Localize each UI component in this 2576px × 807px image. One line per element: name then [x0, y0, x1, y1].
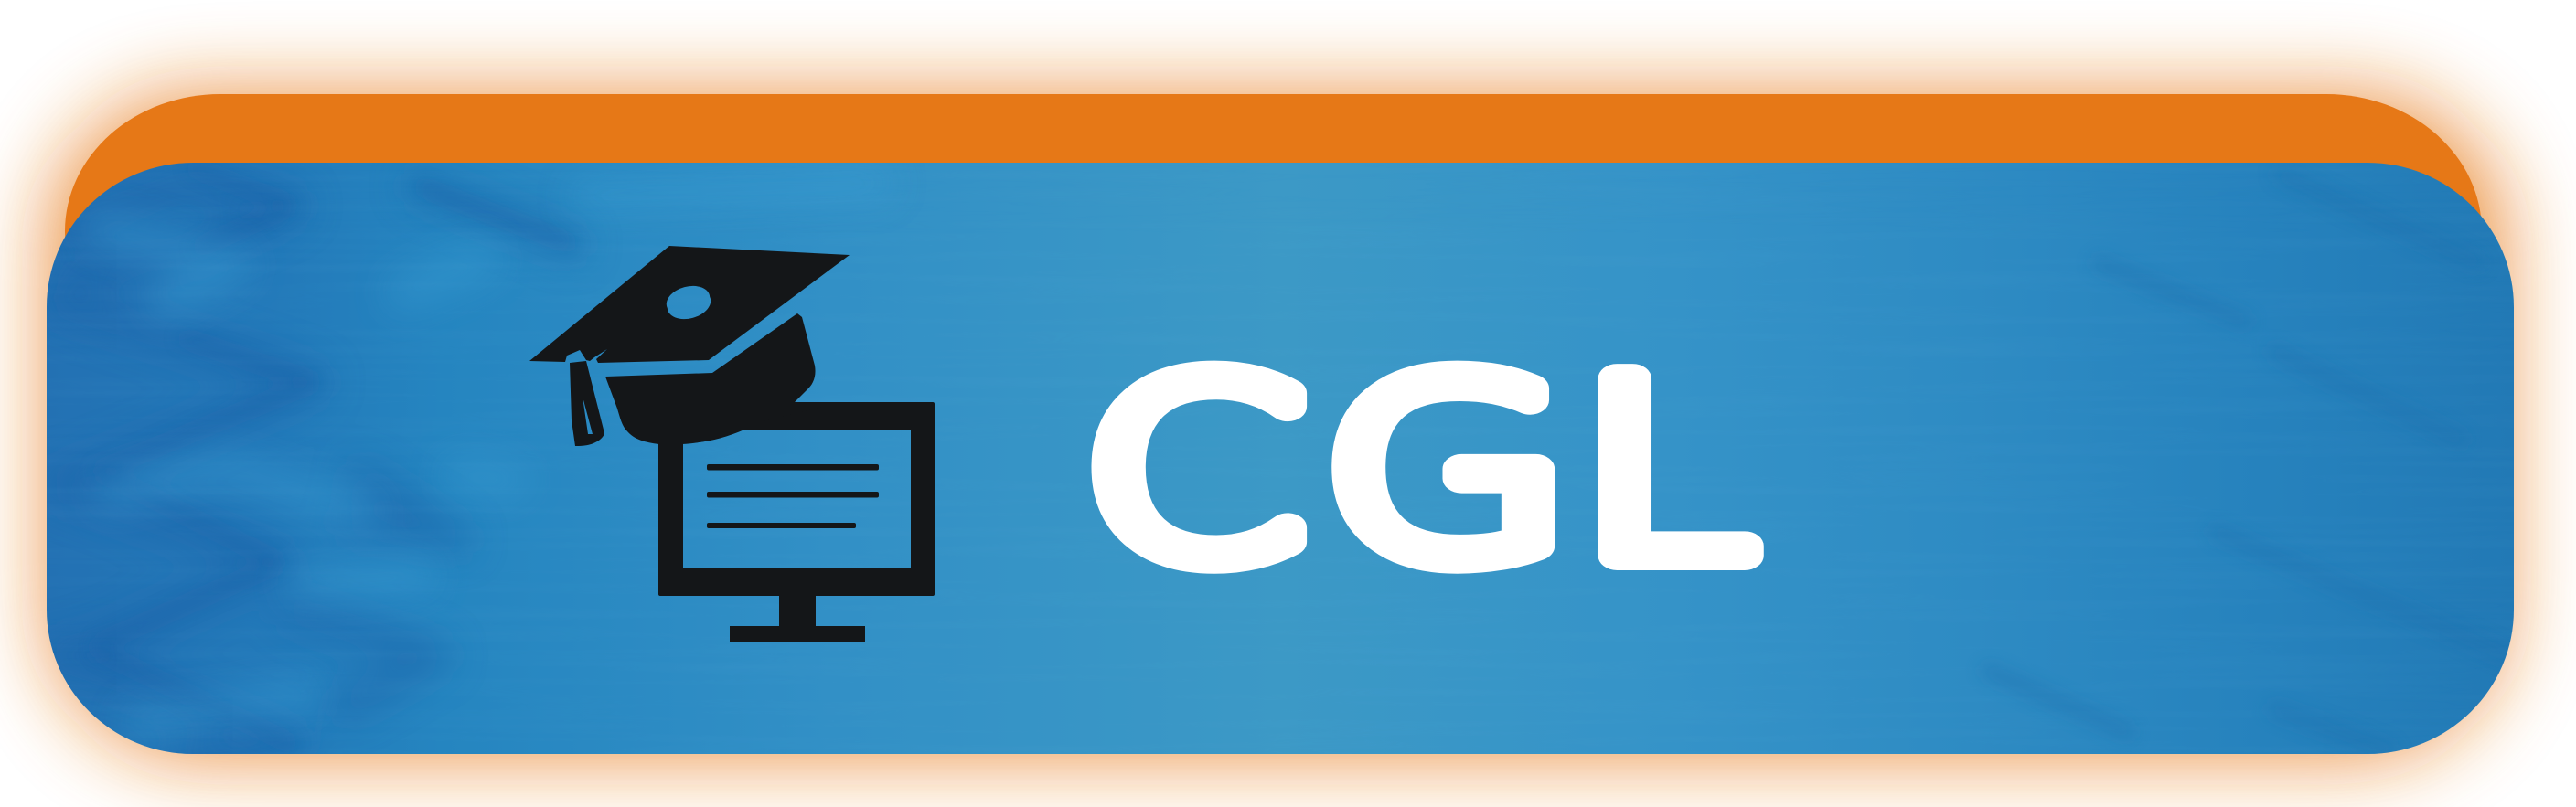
monitor body — [658, 402, 935, 642]
title: CGL: CGL — [1085, 330, 1755, 613]
screen text lines — [707, 464, 879, 528]
panel: blue banner — [47, 163, 2514, 759]
cap tassel — [570, 361, 604, 446]
icon: graduation cap on computer monitor — [529, 246, 935, 642]
orange back panel — [65, 94, 2482, 368]
cap top board — [529, 246, 850, 363]
orange glow behind the banner — [50, 94, 2503, 757]
cap base — [605, 313, 823, 444]
